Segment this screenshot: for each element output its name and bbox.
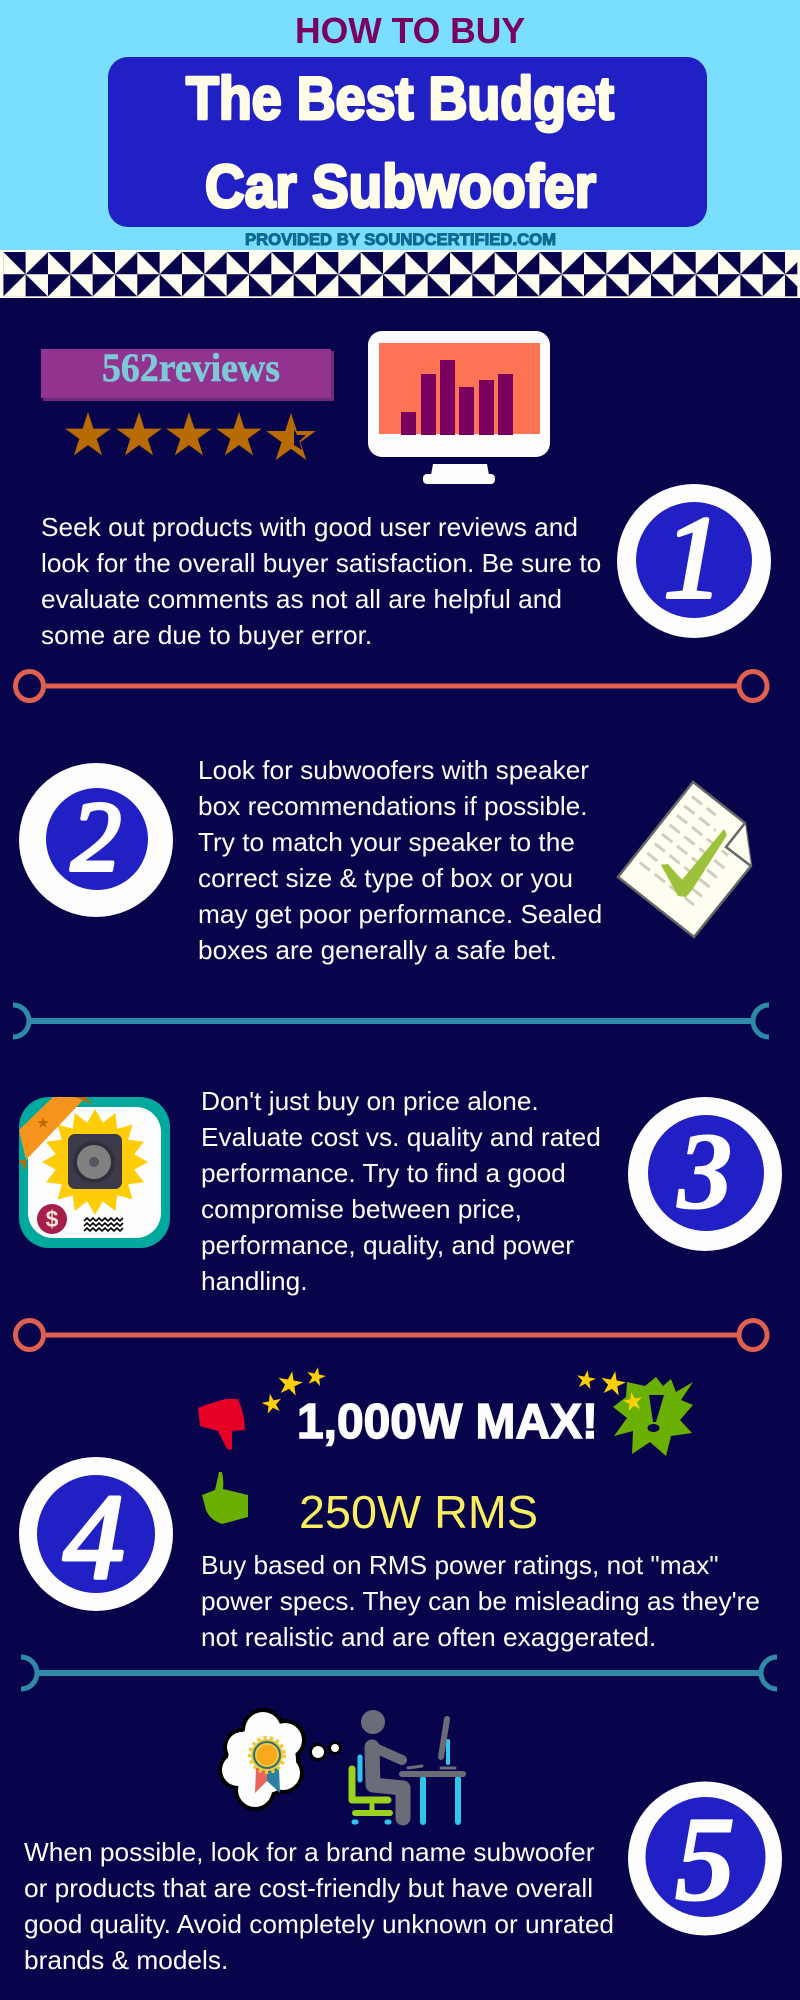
- header band: [0, 0, 800, 250]
- icon: checked document: [618, 782, 751, 937]
- title line two: Car Subwoofer: [205, 153, 596, 220]
- number badge 1: 1: [664, 492, 722, 623]
- text block: step 4: not realistic and are often exaggerated.: [201, 1622, 656, 1652]
- icon: green burst exclamation: [613, 1377, 693, 1456]
- text block: step 1: look for the overall buyer satisfaction. Be sure to: [41, 548, 601, 578]
- number badge 4: [19, 1457, 173, 1611]
- text block: step 2: boxes are generally a safe bet.: [198, 935, 557, 965]
- text block: step 4: [201, 1550, 760, 1652]
- icon: monitor with bar chart: [368, 331, 550, 484]
- max power claim: 1,000W MAX!: [297, 1395, 598, 1449]
- text block: step 3: [201, 1086, 601, 1296]
- icon: thumbs up: [202, 1472, 248, 1524]
- text block: step 3: handling.: [201, 1266, 308, 1296]
- text block: step 4: Buy based on RMS power ratings, not "max": [201, 1550, 719, 1580]
- text block: step 5: [24, 1837, 614, 1975]
- panel: step 2 speaker box: [19, 755, 751, 965]
- decorative yellow stars left: [260, 1365, 327, 1414]
- number badge 2: 2: [71, 781, 121, 892]
- text block: step 2: Look for subwoofers with speaker: [198, 755, 589, 785]
- text block: step 2: Try to match your speaker to the: [198, 827, 575, 857]
- text block: step 2: [198, 755, 602, 965]
- text block: step 3: performance. Try to find a good: [201, 1158, 566, 1188]
- text block: step 3: performance, quality, and power: [201, 1230, 574, 1260]
- divider 3: [16, 1320, 767, 1350]
- text block: step 4: power specs. They can be misleading as they're: [201, 1586, 760, 1616]
- panel: step 5 brands: [24, 1708, 782, 1975]
- divider 4: [21, 1657, 777, 1689]
- text block: step 2: correct size & type of box or you: [198, 863, 573, 893]
- decorative yellow stars right: [575, 1369, 644, 1412]
- text block: step 1: evaluate comments as not all are helpful and: [41, 584, 562, 614]
- text block: step 3: Don't just buy on price alone.: [201, 1086, 539, 1116]
- text block: step 1: [41, 512, 601, 650]
- text block: step 2: may get poor performance. Sealed: [198, 899, 602, 929]
- divider 2: [13, 1005, 769, 1037]
- text block: step 5: brands & models.: [24, 1945, 228, 1975]
- text block: step 2: box recommendations if possible.: [198, 791, 588, 821]
- text block: step 3: compromise between price,: [201, 1194, 522, 1224]
- number badge 1: [617, 484, 771, 638]
- panel: step 1 reviews: [41, 331, 771, 650]
- divider 1: [16, 672, 767, 700]
- title panel: [108, 57, 707, 227]
- icon: thought cloud with award ribbon: [218, 1708, 342, 1811]
- icon: person at desk: [352, 1710, 463, 1822]
- number badge 3: 3: [676, 1110, 732, 1232]
- icon: thumbs down: [198, 1399, 245, 1450]
- provided by credit: PROVIDED BY SOUNDCERTIFIED.COM: [245, 231, 556, 249]
- RMS power rating: 250W RMS: [299, 1486, 538, 1538]
- star rating: [65, 412, 316, 460]
- text block: step 5: good quality. Avoid completely unknown or unrated: [24, 1909, 614, 1939]
- icon: speaker app badge: $: [46, 1206, 59, 1232]
- number badge 4: 4: [64, 1470, 124, 1605]
- review banner: [41, 345, 334, 401]
- icon: speaker app badge: [19, 1097, 170, 1248]
- panel: step 4 power ratings: [19, 1365, 760, 1652]
- number badge 2: [19, 763, 173, 917]
- text block: step 5: or products that are cost-friendly but have overall: [24, 1873, 593, 1903]
- text block: step 1: Seek out products with good user reviews and: [41, 512, 578, 542]
- triangle pattern band: [0, 250, 800, 298]
- panel: step 3 price: [19, 1086, 782, 1296]
- number badge 5: 5: [674, 1792, 736, 1927]
- text block: step 1: some are due to buyer error.: [41, 620, 372, 650]
- review banner: 562reviews: [102, 345, 280, 390]
- title line one: The Best Budget: [186, 65, 614, 132]
- text block: step 3: Evaluate cost vs. quality and rated: [201, 1122, 601, 1152]
- heading: how to buy: HOW TO BUY: [295, 10, 525, 51]
- number badge 3: [628, 1097, 782, 1251]
- text block: step 5: When possible, look for a brand name subwoofer: [24, 1837, 595, 1867]
- number badge 5: [628, 1782, 782, 1936]
